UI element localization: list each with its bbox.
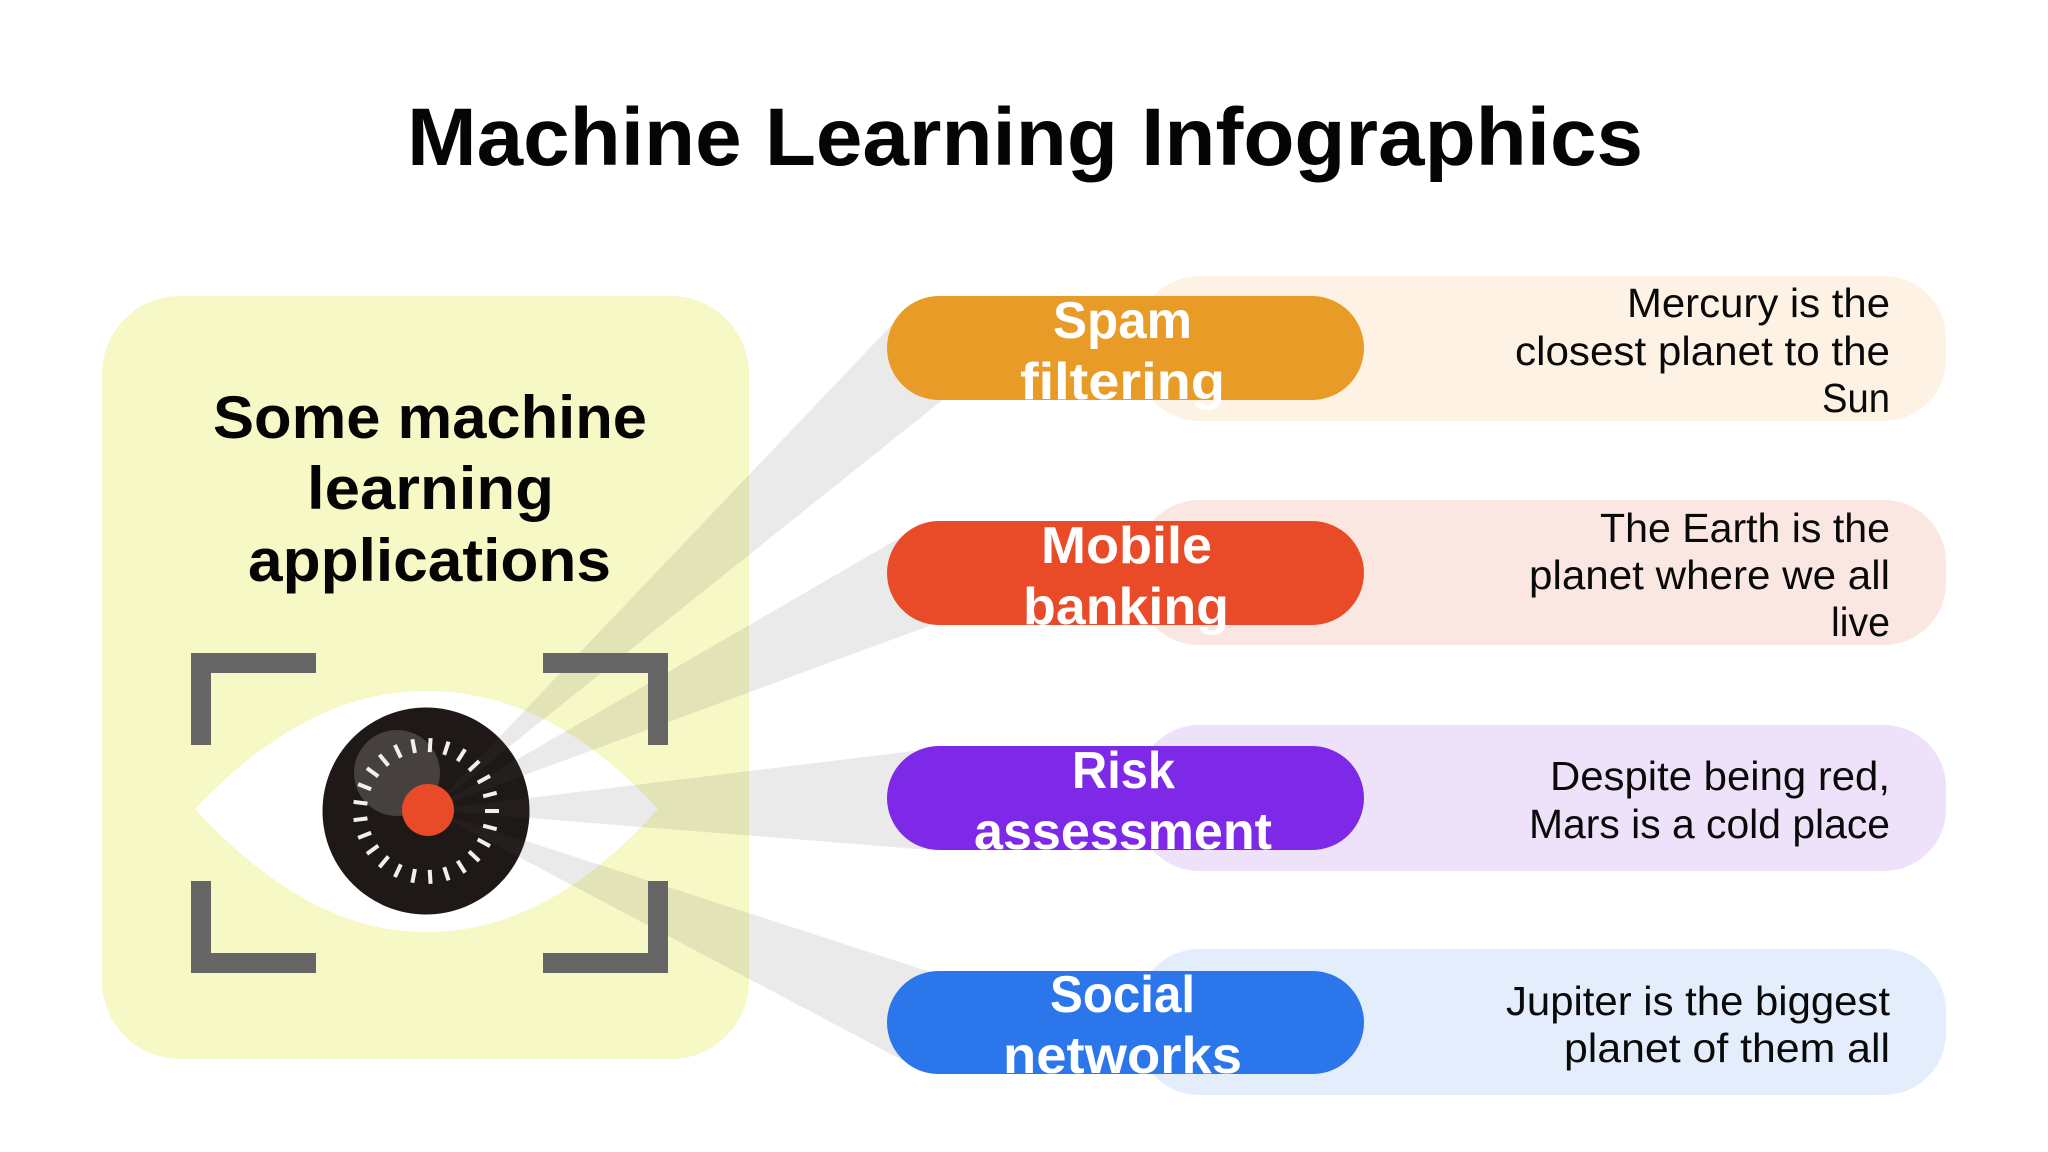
description pill: social networks: Jupiter is the biggest (1506, 978, 1891, 1024)
description pill: mobile banking: The Earth is the (1600, 505, 1890, 551)
row: spam filtering (887, 276, 1946, 421)
label pill: spam filtering (887, 292, 1364, 411)
label pill: spam filtering: Spam (1053, 292, 1192, 350)
label pill: spam filtering: filtering (1020, 353, 1225, 411)
label pill: mobile banking (887, 517, 1364, 636)
label pill: social networks: Social (1050, 966, 1195, 1024)
icon: viewfinder corner brackets (191, 653, 668, 973)
label pill: social networks: networks (1003, 1027, 1242, 1085)
row: social networks (887, 949, 1946, 1095)
row: risk assessment (887, 725, 1946, 871)
label pill: risk assessment (887, 742, 1364, 861)
label pill: mobile banking: Mobile (1041, 517, 1212, 575)
label pill: mobile banking: banking (1023, 578, 1229, 636)
description pill: mobile banking (1137, 500, 1946, 645)
row: mobile banking (887, 500, 1946, 645)
panel heading: applications (248, 527, 611, 594)
panel: machine learning applications (102, 296, 749, 1059)
description pill: social networks (1137, 949, 1946, 1095)
description pill: spam filtering (1137, 276, 1946, 421)
description pill: social networks: planet of them all (1564, 1025, 1890, 1071)
icon: eye with pupil (195, 691, 658, 932)
description pill: spam filtering: Sun (1822, 375, 1890, 421)
description pill: risk assessment: Despite being red, (1550, 753, 1890, 799)
description pill: spam filtering: Mercury is the (1627, 280, 1890, 326)
icon: iris ticks (354, 738, 499, 884)
description pill: risk assessment (1137, 725, 1946, 871)
panel heading (213, 384, 647, 594)
panel heading: Some machine (213, 384, 647, 451)
description pill: mobile banking: live (1831, 599, 1890, 645)
description pill: spam filtering: closest planet to the (1515, 328, 1890, 374)
panel heading: learning (307, 455, 554, 522)
icon: red iris centre (402, 784, 454, 836)
description pill: mobile banking: planet where we all (1529, 552, 1890, 598)
label pill: risk assessment: assessment (974, 803, 1272, 861)
description pill: risk assessment: Mars is a cold place (1529, 801, 1890, 847)
beams from eye to the four applications (430, 311, 950, 1072)
title: Machine Learning Infographics (407, 92, 1643, 183)
label pill: risk assessment: Risk (1072, 742, 1175, 800)
label pill: social networks (887, 966, 1364, 1085)
